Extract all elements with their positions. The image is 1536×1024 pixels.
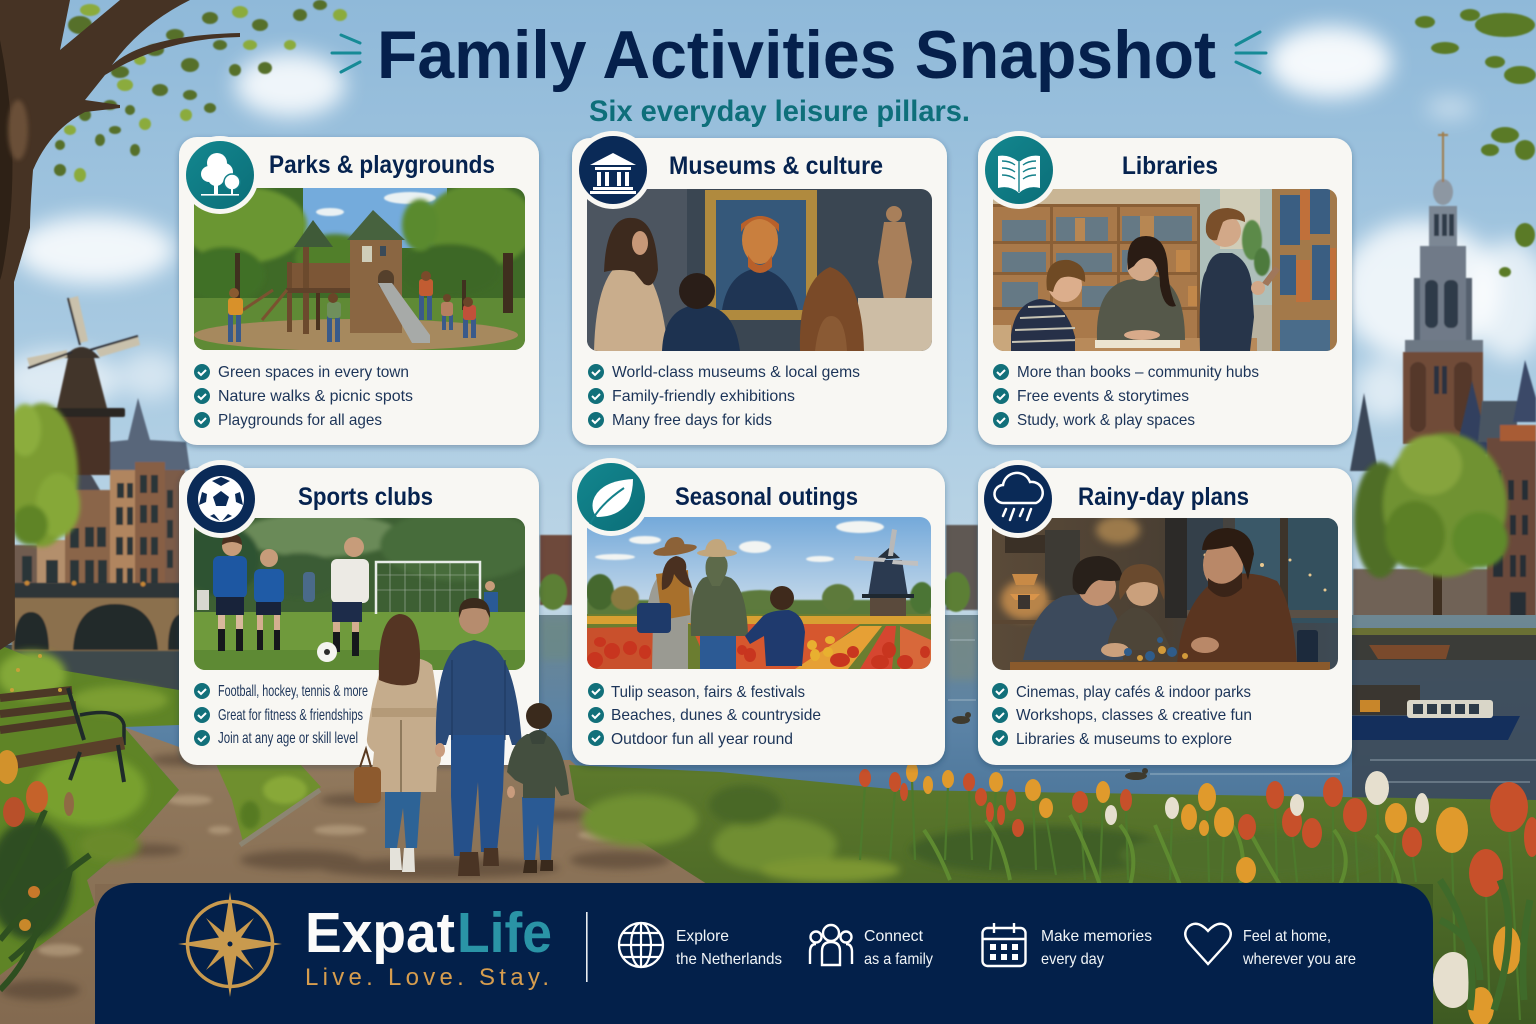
photo: library bbox=[993, 189, 1337, 351]
icon: football bbox=[182, 460, 260, 538]
grass strip by path bbox=[216, 764, 321, 845]
icon: family bbox=[810, 925, 852, 965]
icon: globe bbox=[619, 923, 663, 967]
bullet list: Workshops, classes & creative fun bbox=[1016, 707, 1252, 724]
father bbox=[435, 598, 522, 876]
bullet list bbox=[194, 683, 368, 747]
heading: Seasonal outings bbox=[675, 483, 858, 511]
grass left bbox=[0, 645, 179, 975]
left tree foliage bbox=[6, 403, 80, 547]
compass logo bbox=[178, 892, 282, 997]
footer bar bbox=[95, 883, 1433, 1024]
text: explore: the Netherlands bbox=[676, 951, 782, 968]
bullet list: Many free days for kids bbox=[612, 412, 772, 429]
text: connect: Connect bbox=[864, 928, 924, 945]
park bench bbox=[0, 688, 124, 782]
text: connect bbox=[864, 928, 933, 968]
brand wordmark: Life bbox=[457, 901, 552, 965]
title block bbox=[332, 17, 1266, 128]
heading: Rainy-day plans bbox=[1078, 483, 1249, 511]
bullet list: Libraries & museums to explore bbox=[1016, 731, 1232, 748]
text: memories bbox=[1041, 928, 1152, 968]
right trees bbox=[1354, 433, 1508, 633]
brand wordmark: Expat bbox=[305, 901, 455, 965]
panel: parks and playgrounds bbox=[179, 136, 539, 445]
bullet list: Football, hockey, tennis & more bbox=[218, 683, 368, 700]
bullet list bbox=[588, 364, 860, 429]
bullet list: Outdoor fun all year round bbox=[611, 731, 793, 748]
distant buildings between cards bbox=[539, 525, 978, 612]
icon: open book bbox=[980, 131, 1058, 209]
mother bbox=[354, 614, 441, 872]
bullet list: Join at any age or skill level bbox=[218, 730, 358, 747]
title rays right bbox=[1236, 32, 1266, 73]
icon: heart bbox=[1185, 924, 1231, 964]
bullet list bbox=[588, 683, 821, 748]
bullet list: Green spaces in every town bbox=[218, 364, 409, 381]
photo: football bbox=[194, 518, 525, 670]
icon: leaf bbox=[572, 458, 650, 536]
left buildings bbox=[12, 398, 190, 598]
bullet list: Study, work & play spaces bbox=[1017, 412, 1195, 429]
heading: Libraries bbox=[1122, 152, 1218, 180]
child bbox=[507, 703, 569, 873]
heading: Museums & culture bbox=[669, 152, 883, 180]
text: connect: as a family bbox=[864, 951, 933, 968]
bullet list: World-class museums & local gems bbox=[612, 364, 860, 381]
bullet list bbox=[992, 683, 1252, 748]
text: feel at home: Feel at home, bbox=[1243, 928, 1331, 945]
bullet list bbox=[993, 364, 1259, 429]
top-left tree bbox=[0, 0, 347, 650]
bullet list: More than books – community hubs bbox=[1017, 364, 1259, 381]
left foreground flowers bbox=[0, 654, 90, 990]
icon: museum bbox=[574, 131, 652, 209]
bullet list: Free events & storytimes bbox=[1017, 388, 1189, 405]
bullet list: Great for fitness & friendships bbox=[218, 707, 363, 724]
photo: tulip field bbox=[586, 517, 934, 669]
heading: Parks & playgrounds bbox=[269, 151, 495, 179]
text: explore bbox=[676, 928, 782, 968]
windmill bbox=[27, 296, 140, 475]
ducks bbox=[952, 712, 1148, 780]
text: feel at home: wherever you are bbox=[1242, 951, 1356, 968]
top-right foliage bbox=[1415, 9, 1536, 277]
right buildings bbox=[1350, 360, 1536, 628]
title: Family Activities Snapshot bbox=[377, 17, 1216, 93]
bullet list: Family-friendly exhibitions bbox=[612, 388, 795, 405]
icon: rain cloud bbox=[979, 460, 1057, 538]
bullet list: Tulip season, fairs & festivals bbox=[611, 684, 805, 701]
water bbox=[0, 615, 1536, 885]
panel: libraries bbox=[978, 131, 1352, 445]
brick path bbox=[0, 727, 707, 1024]
heading: Sports clubs bbox=[298, 483, 433, 511]
text: explore: Explore bbox=[676, 928, 729, 945]
text: memories: Make memories bbox=[1041, 928, 1152, 945]
photo: playground bbox=[183, 183, 535, 351]
title rays left bbox=[332, 35, 360, 72]
ground behind footer corners bbox=[85, 880, 1445, 930]
family walking on the path bbox=[354, 598, 569, 876]
brand wordmark: Live. Love. Stay. bbox=[305, 964, 549, 991]
bullet list: Cinemas, play cafés & indoor parks bbox=[1016, 684, 1251, 701]
bullet list: Beaches, dunes & countryside bbox=[611, 707, 821, 724]
text: feel at home bbox=[1242, 928, 1356, 968]
bullet list: Playgrounds for all ages bbox=[218, 412, 382, 429]
moored boats bbox=[1352, 645, 1520, 740]
stone bridge bbox=[12, 580, 180, 651]
text: memories: every day bbox=[1041, 951, 1104, 968]
photo: family puzzle indoors bbox=[992, 516, 1338, 670]
panel: sports clubs bbox=[179, 460, 540, 765]
bullet list bbox=[194, 364, 413, 429]
icon: tree bbox=[181, 136, 259, 214]
photo: museum bbox=[587, 189, 932, 351]
far right quay bbox=[1352, 628, 1536, 660]
bullet list: Nature walks & picnic spots bbox=[218, 388, 413, 405]
icon: calendar bbox=[982, 923, 1026, 966]
right church tower bbox=[1403, 132, 1483, 444]
panel: seasonal outings bbox=[572, 458, 945, 765]
subtitle: Six everyday leisure pillars. bbox=[589, 95, 970, 128]
grass bank with tulips right bbox=[569, 765, 1536, 1024]
panel: rainy-day plans bbox=[978, 460, 1352, 765]
panel: museums and culture bbox=[572, 131, 947, 445]
brand wordmark bbox=[305, 901, 552, 991]
